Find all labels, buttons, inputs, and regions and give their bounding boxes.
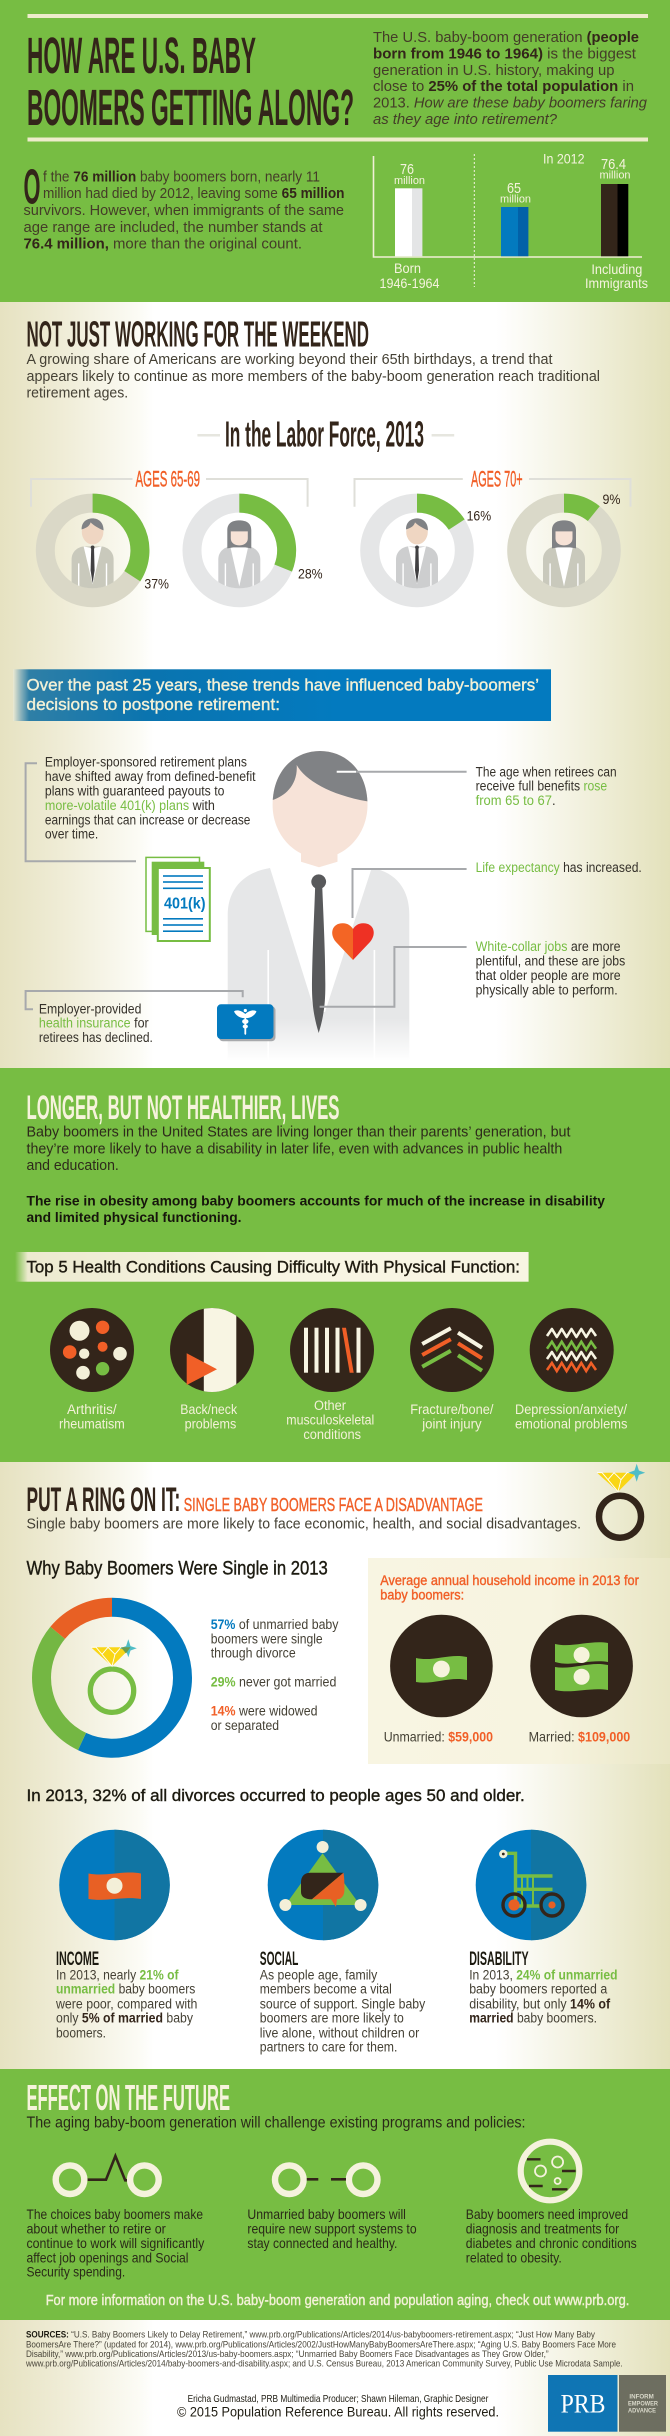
legend: why single: 14% were widowed	[211, 1703, 318, 1718]
labels: health conditions	[59, 1398, 628, 1442]
heading: put a ring on it	[26, 1481, 483, 1519]
chart labels: 76.4	[601, 156, 626, 173]
intro text: 2013. How are these baby boomers faring	[373, 96, 647, 112]
section: health background	[0, 1068, 670, 1462]
icon: 401(k) documents	[146, 857, 210, 941]
labels: health conditions: rheumatism	[59, 1416, 125, 1431]
jacket	[228, 868, 409, 1060]
donut: women 70+, 9%	[517, 492, 620, 598]
panel: household income: Married: $109,000	[529, 1729, 630, 1745]
legend: why single: boomers were single	[211, 1631, 323, 1646]
legend: why single	[211, 1617, 339, 1733]
text: social: source of support. Single baby	[260, 1996, 425, 2011]
credits: © 2015 Population Reference Bureau. All rights reserved.	[177, 2404, 499, 2420]
section: future background	[0, 2069, 670, 2320]
drop cap paragraph: age range are included, the number stands at	[24, 220, 323, 236]
chart labels: 65	[507, 180, 521, 197]
text: social: partners to care for them.	[260, 2040, 397, 2055]
section: footer background	[0, 2320, 670, 2436]
text: working beyond 65: A growing share of Americans are working beyond their 65th birthdays, a trend that	[26, 352, 552, 368]
text: health insurance: retirees has declined.	[39, 1030, 153, 1045]
logo: PRB: ADVANCE	[628, 2408, 656, 2414]
bar chart: population counts	[374, 150, 648, 291]
intro text: The U.S. baby-boom generation (people	[373, 30, 639, 46]
chart labels: Born	[394, 260, 421, 276]
text: future support: require new support systems to	[247, 2221, 417, 2237]
legend: why single: 57% of unmarried baby	[211, 1617, 339, 1632]
text: future support	[247, 2206, 417, 2251]
text: life expectancy: Life expectancy has increased.	[476, 860, 642, 875]
donut: women 65-69, 28%: 28%	[298, 566, 323, 581]
icon: diamond ring	[597, 1464, 645, 1538]
text: obesity: and limited physical functioning.	[26, 1209, 242, 1225]
text: income: only 5% of married baby	[56, 2011, 193, 2026]
text: EFFECT ON THE FUTURE	[26, 2077, 230, 2118]
heading: put a ring on it: SINGLE BABY BOOMERS FACE A DISADVANTAGE	[184, 1494, 483, 1515]
text: white-collar jobs: White-collar jobs are more	[476, 939, 621, 954]
text: retirement plans: Employer-sponsored retirement plans	[45, 755, 247, 770]
sources: SOURCES: “U.S. Baby Boomers Likely to Delay Retirement,” www.prb.org/Publications/Articles/2014/us-babyboomers-retirement.aspx; “Just How Many Baby	[26, 2330, 595, 2341]
labels: health conditions: Back/neck	[180, 1402, 237, 1417]
sources	[25, 2330, 623, 2370]
donut: men 70+, 16%: 16%	[467, 509, 491, 524]
leader lines	[26, 763, 467, 1009]
panel: household income	[368, 1558, 670, 1764]
head with hair	[272, 751, 368, 868]
chart labels: Including	[591, 261, 642, 277]
icon: 401(k) documents: 401(k)	[164, 896, 206, 913]
text: future jobs: The choices baby boomers make	[26, 2206, 203, 2222]
text: living longer	[26, 1125, 570, 1174]
donut: women 65-69, 28%	[192, 503, 323, 598]
chart labels: 1946-1964	[380, 275, 440, 291]
icon: fracture	[410, 1308, 494, 1392]
text: disability: married baby boomers.	[469, 2011, 597, 2026]
icon: married money	[530, 1615, 633, 1717]
text: future jobs: affect job openings and Social	[26, 2249, 188, 2265]
text: income: In 2013, nearly 21% of	[56, 1967, 179, 1982]
text: future diagnosis: diabetes and chronic conditions	[466, 2235, 637, 2251]
section: marriage background	[0, 1462, 670, 2069]
text: income	[55, 1949, 197, 2040]
text: living longer: they’re more likely to have a disability in later life, even with advances in public health	[26, 1141, 562, 1157]
bracket: ages 70+: AGES 70+	[471, 467, 523, 492]
text: health insurance: Employer-provided	[39, 1001, 141, 1016]
banner: past 25 years: decisions to postpone retirement:	[26, 695, 280, 714]
legend: why single: through divorce	[211, 1646, 296, 1661]
drop cap paragraph: f the 76 million baby boomers born, nearly 11	[43, 170, 320, 186]
labels: health conditions: problems	[185, 1416, 237, 1431]
text: benefits age	[476, 765, 617, 808]
drop cap paragraph: O	[24, 160, 40, 214]
drop cap paragraph	[24, 160, 344, 253]
logo: PRB: INFORM	[629, 2395, 654, 2401]
heading: in the labor force: In the Labor Force, 2013	[225, 414, 424, 455]
panel: household income: baby boomers:	[380, 1587, 464, 1602]
heading: why single: Why Baby Boomers Were Single in 2013	[26, 1558, 328, 1579]
text: white-collar jobs: plentiful, and these are jobs	[476, 953, 625, 968]
text: benefits age: receive full benefits rose	[476, 779, 607, 794]
text: income: unmarried baby boomers	[56, 1982, 196, 1997]
banner: top 5 conditions: Top 5 Health Conditions Causing Difficulty With Physical Function:	[26, 1259, 520, 1277]
text: working beyond 65: appears likely to continue as more members of the baby-boom generation reach traditional	[26, 369, 600, 385]
icon: arthritis	[50, 1308, 134, 1392]
text: benefits age: The age when retirees can	[476, 765, 617, 780]
intro text: generation in U.S. history, making up	[373, 63, 614, 79]
legend: why single: 29% never got married	[211, 1675, 336, 1690]
icon: diagnosis circle	[521, 2142, 579, 2200]
text: social: As people age, family	[260, 1967, 378, 1982]
chart labels: 76	[400, 161, 414, 178]
legend: why single: or separated	[211, 1718, 279, 1733]
icon: disability	[476, 1830, 586, 1940]
text: future support: Unmarried baby boomers will	[247, 2206, 406, 2222]
chart labels: million	[394, 175, 425, 187]
title	[27, 27, 354, 136]
labels: health conditions: Arthritis/	[67, 1402, 117, 1417]
text: future jobs: Security spending.	[26, 2264, 125, 2280]
text: social: live alone, without children or	[260, 2025, 420, 2040]
labels: health conditions: Other	[314, 1398, 346, 1413]
text: white-collar jobs: physically able to perform.	[476, 982, 618, 997]
icon: social	[268, 1830, 378, 1940]
labels: health conditions: emotional problems	[515, 1416, 628, 1431]
banner: past 25 years	[13, 669, 551, 721]
text: single disadvantages: Single baby boomers are more likely to face economic, health, and social disadvantages.	[26, 1516, 581, 1532]
icon: income	[59, 1830, 170, 1940]
text: social	[260, 1949, 425, 2055]
text: white-collar jobs	[476, 939, 625, 997]
illustration: businessman	[227, 745, 410, 1061]
section: header background	[0, 0, 670, 302]
text: retirement plans	[45, 755, 256, 842]
chart labels: Immigrants	[585, 275, 648, 291]
text: income: were poor, compared with	[55, 1996, 197, 2011]
text: retirement plans: plans with guaranteed payouts to	[45, 784, 224, 799]
title: HOW ARE U.S. BABY	[27, 27, 256, 84]
labels: health conditions: musculoskeletal	[286, 1412, 374, 1427]
logo: PRB: PRB	[561, 2389, 606, 2418]
heart	[332, 923, 374, 960]
text: obesity	[26, 1192, 605, 1225]
text: benefits age: from 65 to 67.	[476, 793, 556, 808]
text: living longer: and education.	[26, 1158, 119, 1174]
text: retirement plans: have shifted away from defined-benefit	[45, 769, 256, 784]
banner: top 5 conditions	[15, 1252, 529, 1282]
labels: health conditions: conditions	[303, 1427, 361, 1442]
text: future diagnosis	[466, 2206, 637, 2265]
text: retirement plans: earnings that can increase or decrease	[45, 812, 250, 827]
sources: Disability,” www.prb.org/Publications/Articles/2013/us-baby-boomers.aspx; “Unmarried Baby Boomers Face Disadvantages as They Grow Older,”	[26, 2349, 549, 2360]
text: disability: In 2013, 24% of unmarried	[469, 1967, 618, 1982]
bracket: ages 65-69	[31, 467, 308, 507]
panel: household income: Unmarried: $59,000	[384, 1729, 493, 1745]
icon: back and neck	[170, 1305, 254, 1395]
intro text	[373, 30, 647, 128]
panel: household income: Average annual household income in 2013 for	[380, 1573, 639, 1588]
bracket: ages 70+	[354, 467, 630, 507]
icon: linked rings with spike	[56, 2156, 159, 2194]
donut: women 70+, 9%: 9%	[602, 492, 620, 507]
text: obesity: The rise in obesity among baby boomers accounts for much of the increase in disability	[26, 1192, 605, 1208]
section: working background	[0, 302, 670, 1068]
icon: green ring	[90, 1639, 137, 1712]
donut: men 65-69, 37%	[45, 503, 169, 598]
labels: health conditions: joint injury	[421, 1416, 482, 1431]
text: retirement plans: over time.	[45, 827, 98, 842]
text: future diagnosis: diagnosis and treatments for	[466, 2221, 619, 2237]
text: disability: baby boomers reported a	[469, 1982, 608, 1997]
chart labels: million	[600, 170, 630, 182]
labels: health conditions: Fracture/bone/	[410, 1402, 494, 1417]
text: white-collar jobs: that older people are more	[476, 968, 621, 983]
text: health insurance	[39, 1001, 153, 1045]
intro text: born from 1946 to 1964) is the biggest	[373, 46, 636, 62]
labels: health conditions: Depression/anxiety/	[515, 1402, 627, 1417]
icon: separated rings	[275, 2165, 378, 2194]
text: challenge programs: The aging baby-boom generation will challenge existing programs and policies:	[26, 2114, 526, 2131]
text: working beyond 65: retirement ages.	[26, 386, 128, 402]
donut chart: why single	[42, 1607, 182, 1748]
bar: 65 million	[501, 207, 528, 256]
text: future diagnosis: related to obesity.	[466, 2249, 562, 2265]
text: disability: DISABILITY	[469, 1949, 529, 1970]
text: social: SOCIAL	[260, 1949, 299, 1970]
heading: divorces: In 2013, 32% of all divorces occurred to people ages 50 and older.	[26, 1787, 525, 1805]
drop cap paragraph: million had died by 2012, leaving some 65 million	[43, 186, 344, 202]
bar: born 76 million	[395, 188, 422, 256]
chart labels: million	[500, 194, 531, 206]
credits: Ericha Gudmastad, PRB Multimedia Producer; Shawn Hileman, Graphic Designer	[188, 2393, 489, 2405]
text: future jobs: about whether to retire or	[26, 2221, 166, 2237]
text: disability	[469, 1949, 618, 2026]
logo: PRB: EMPOWER	[628, 2401, 659, 2407]
text: social: members become a vital	[260, 1982, 392, 1997]
logo: PRB	[548, 2375, 666, 2432]
text: social: boomers are more likely to	[260, 2011, 404, 2026]
intro text: close to 25% of the total population in	[373, 79, 634, 95]
text: future jobs	[26, 2206, 204, 2280]
icon: musculoskeletal	[290, 1308, 374, 1392]
icon: medical card	[217, 1004, 276, 1041]
credits	[177, 2393, 499, 2420]
donut: men 65-69, 37%: 37%	[144, 577, 169, 592]
icon: unmarried money	[390, 1615, 493, 1717]
drop cap paragraph: survivors. However, when immigrants of the same	[24, 203, 344, 219]
drop cap paragraph: 76.4 million, more than the original count.	[24, 237, 302, 253]
intro text: as they age into retirement?	[373, 112, 558, 128]
text: LONGER, BUT NOT HEALTHIER, LIVES	[26, 1089, 340, 1127]
text: health insurance: health insurance for	[39, 1016, 149, 1031]
text: living longer: Baby boomers in the United States are living longer than their parents’ generation, but	[26, 1125, 570, 1141]
chart labels: In 2012	[543, 150, 585, 166]
text: future jobs: continue to work will significantly	[26, 2235, 204, 2251]
text: future diagnosis: Baby boomers need improved	[466, 2206, 628, 2222]
text: future support: stay connected and healthy.	[247, 2235, 397, 2251]
tie	[311, 874, 326, 1033]
text: income: INCOME	[56, 1949, 99, 1970]
text: working beyond 65	[26, 352, 600, 402]
heading: put a ring on it: PUT A RING ON IT:	[26, 1481, 180, 1519]
icon: depression	[530, 1308, 614, 1392]
chart labels	[380, 150, 648, 291]
bracket: ages 65-69: AGES 65-69	[136, 467, 200, 492]
banner: past 25 years: Over the past 25 years, these trends have influenced baby-boomers’	[26, 676, 539, 695]
donut: men 70+, 16%	[370, 503, 491, 598]
text: income: boomers.	[56, 2025, 106, 2040]
text: retirement plans: more-volatile 401(k) plans with	[45, 798, 215, 813]
text: disability: disability, but only 14% of	[469, 1996, 611, 2011]
bar: 76.4 million	[601, 184, 628, 256]
